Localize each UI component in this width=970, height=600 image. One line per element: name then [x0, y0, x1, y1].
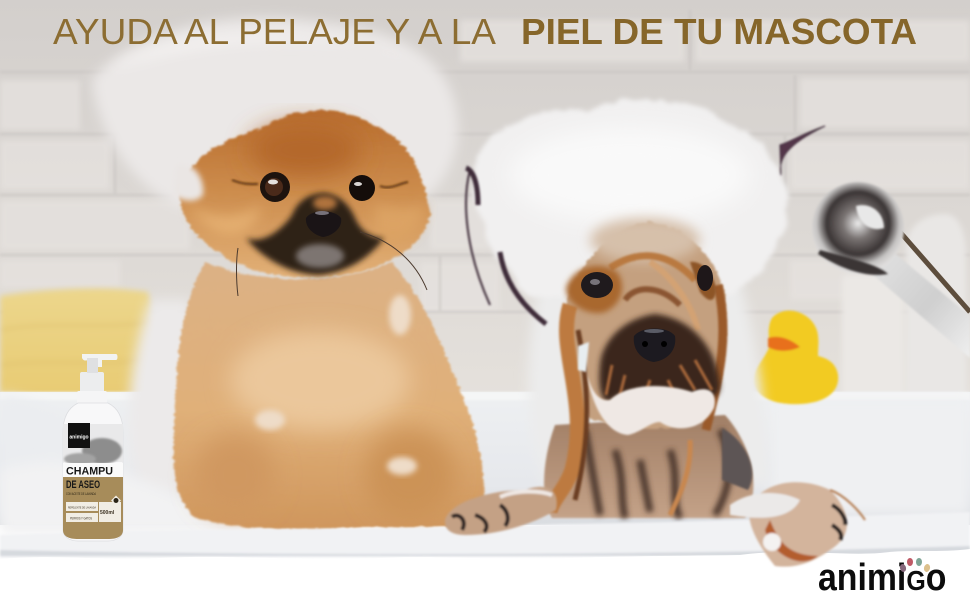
title	[53, 11, 917, 52]
dark ear tips of second dog	[466, 126, 825, 324]
bathtub rim	[0, 512, 970, 558]
muzzle	[599, 314, 720, 402]
chrome faucet	[812, 182, 970, 358]
logo paw dots	[899, 558, 931, 573]
soapy beard	[586, 368, 715, 435]
foam on forehead	[172, 164, 203, 201]
nose	[634, 328, 675, 362]
rubber duck	[754, 311, 838, 404]
muzzle mask	[246, 193, 384, 275]
logo wordmark: animiGo	[818, 555, 946, 598]
small orange dog	[172, 110, 484, 530]
label photo	[63, 424, 123, 462]
eyes and nose	[232, 172, 408, 237]
black logo box: animigo	[69, 434, 89, 440]
title: PIEL DE TU MASCOTA	[521, 11, 917, 52]
yellow towel	[0, 289, 154, 396]
foam: big cap on second dog	[474, 100, 788, 485]
bathtub	[0, 392, 970, 525]
torn white bottom strip	[0, 549, 970, 600]
gold label	[63, 477, 123, 539]
animigo logo	[818, 555, 946, 598]
gold label: 500ml	[100, 510, 115, 516]
background bottles	[842, 214, 966, 403]
eyes	[566, 262, 716, 313]
body	[173, 262, 484, 530]
whiskers	[236, 232, 427, 296]
black logo box	[68, 423, 90, 448]
face	[565, 222, 726, 428]
gold label: REPELENTE DE LAVANDA	[68, 506, 96, 510]
foam: behind small dog	[0, 18, 458, 535]
background: brick wall	[0, 0, 970, 400]
product bottle	[63, 354, 123, 541]
wet yorkshire dog	[544, 218, 753, 518]
gold label: DE ASEO	[66, 479, 100, 491]
collar tag	[578, 342, 589, 372]
bottle body	[63, 403, 123, 541]
white title band	[63, 463, 123, 478]
title: AYUDA AL PELAJE Y A LA	[53, 11, 496, 52]
pump	[77, 354, 118, 404]
gold label: PERROS Y GATOS	[70, 516, 92, 520]
head	[179, 110, 430, 278]
gold label: CON ACEITE DE LAVANDA	[66, 492, 96, 496]
body	[544, 415, 753, 518]
left paw of second dog	[445, 487, 557, 535]
white title band: CHAMPU	[66, 466, 113, 478]
right paw of second dog	[730, 482, 865, 567]
long hair strands	[550, 256, 723, 515]
